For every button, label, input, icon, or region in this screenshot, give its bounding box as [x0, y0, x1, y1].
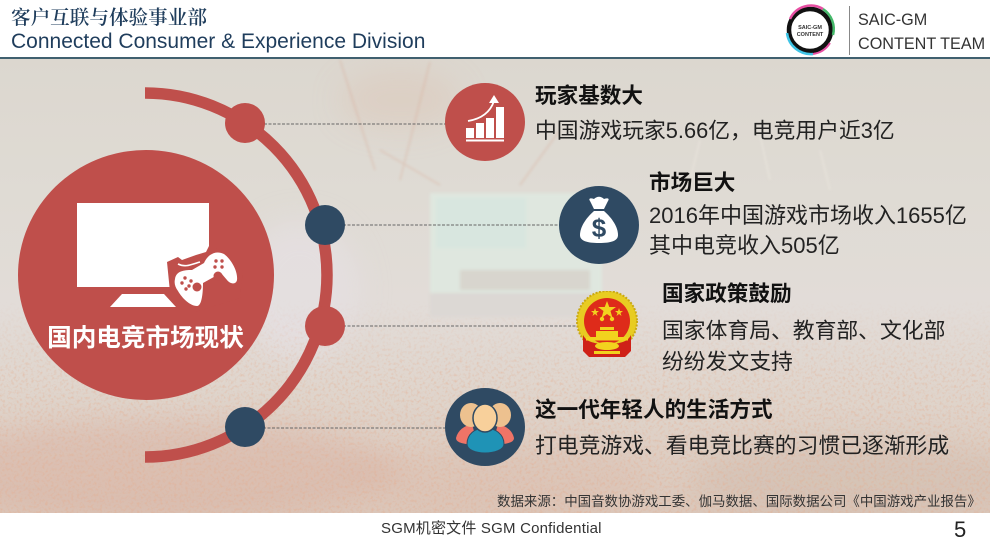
body 4: 打电竞游戏、看电竞比赛的习惯已逐渐形成 — [535, 433, 949, 458]
heading 4: 这一代年轻人的生活方式 — [535, 397, 773, 422]
icon: national emblem — [576, 291, 638, 357]
footer band — [0, 513, 990, 542]
team name: SAIC-GM — [858, 11, 927, 29]
body 3 line 2: 纷纷发文支持 — [662, 349, 793, 374]
heading 2: 市场巨大 — [649, 170, 735, 195]
page number: 5 — [954, 517, 966, 542]
logo: SAIC-GM content ring: SAIC-GM — [798, 25, 822, 31]
title: English division name: Connected Consumer & Experience Division — [11, 30, 425, 53]
heading 1: 玩家基数大 — [535, 83, 643, 108]
connector lines — [245, 124, 576, 428]
icon: money bag: $ — [592, 213, 607, 243]
body 1: 中国游戏玩家5.66亿，电竞用户近3亿 — [535, 118, 895, 143]
heading 3: 国家政策鼓励 — [662, 281, 792, 306]
node 3 — [305, 306, 345, 346]
block 3: policy — [662, 281, 945, 374]
screen in arena photo — [430, 193, 602, 317]
stage light streaks — [340, 60, 560, 185]
block 4: lifestyle — [535, 397, 949, 458]
body 3: 国家体育局、教育部、文化部 — [662, 318, 945, 343]
confidentiality label: SGM机密文件 SGM Confidential — [381, 520, 602, 537]
node 1 — [225, 103, 265, 143]
crowd speckle — [0, 300, 990, 513]
logo divider — [849, 6, 850, 55]
title: Chinese division name: 客户互联与体验事业部 — [11, 8, 207, 29]
arc — [145, 93, 327, 457]
icon: people group — [445, 388, 525, 466]
logo: SAIC-GM content ring: CONTENT — [797, 32, 824, 38]
block 2: market size — [649, 170, 967, 258]
icon: money bag — [559, 186, 639, 264]
icon: growth chart — [445, 83, 525, 161]
source note: 数据来源：中国音数协游戏工委、伽马数据、国际数据公司《中国游戏产业报告》 — [497, 494, 981, 509]
icon: monitor with gamepad — [77, 203, 243, 312]
node 2 — [305, 205, 345, 245]
body 2 line 2: 其中电竞收入505亿 — [649, 233, 840, 258]
team name: CONTENT TEAM — [858, 35, 985, 53]
block 1: player base — [535, 83, 895, 143]
team name — [858, 11, 985, 53]
header: division title — [0, 0, 990, 57]
header rule — [0, 57, 990, 58]
circle title: 国内电竞市场现状 — [47, 324, 244, 352]
body 2: 2016年中国游戏市场收入1655亿 — [649, 203, 967, 228]
logo: SAIC-GM content ring — [786, 4, 835, 56]
node 4 — [225, 407, 265, 447]
